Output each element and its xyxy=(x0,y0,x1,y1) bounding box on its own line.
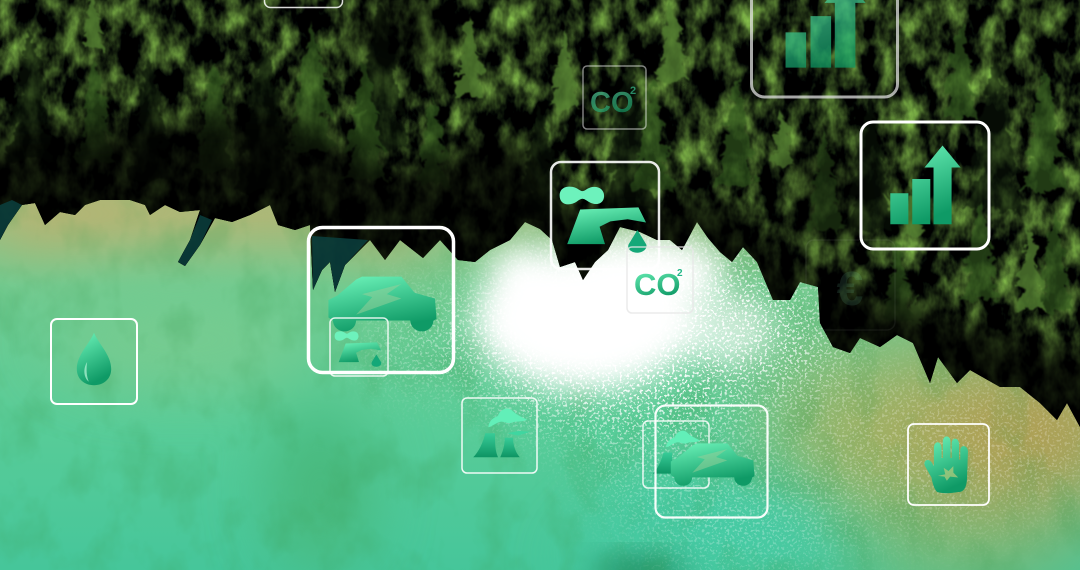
icon: faded CO2 badge: CO xyxy=(590,87,634,119)
forest canopy xyxy=(0,0,1080,427)
icon: faded CO2 badge xyxy=(583,66,646,129)
icon: nearly invisible euro badge xyxy=(806,240,895,330)
sun glare on the water xyxy=(355,222,1080,570)
icon: second electric car xyxy=(656,406,768,518)
icon: electric car xyxy=(308,228,454,372)
icon: faint CO2 badge: CO xyxy=(634,267,680,302)
icon: small factory behind car xyxy=(643,421,709,488)
icon: hand with leaf xyxy=(908,424,989,505)
icon: faint CO2 badge: 2 xyxy=(677,268,683,279)
icon: faded CO2 badge: 2 xyxy=(630,85,636,97)
icon: growth chart xyxy=(861,122,989,249)
icon: partial frame at top edge xyxy=(264,0,342,8)
icon: factory with smoke xyxy=(462,398,537,473)
icon: small water tap xyxy=(330,318,388,376)
icon: faint CO2 badge xyxy=(627,247,693,313)
icon: nearly invisible euro badge: € xyxy=(837,263,863,316)
icon: water tap xyxy=(551,162,659,269)
icon: water drop xyxy=(51,319,137,404)
icon: faded growth chart, cropped at top xyxy=(752,0,898,97)
